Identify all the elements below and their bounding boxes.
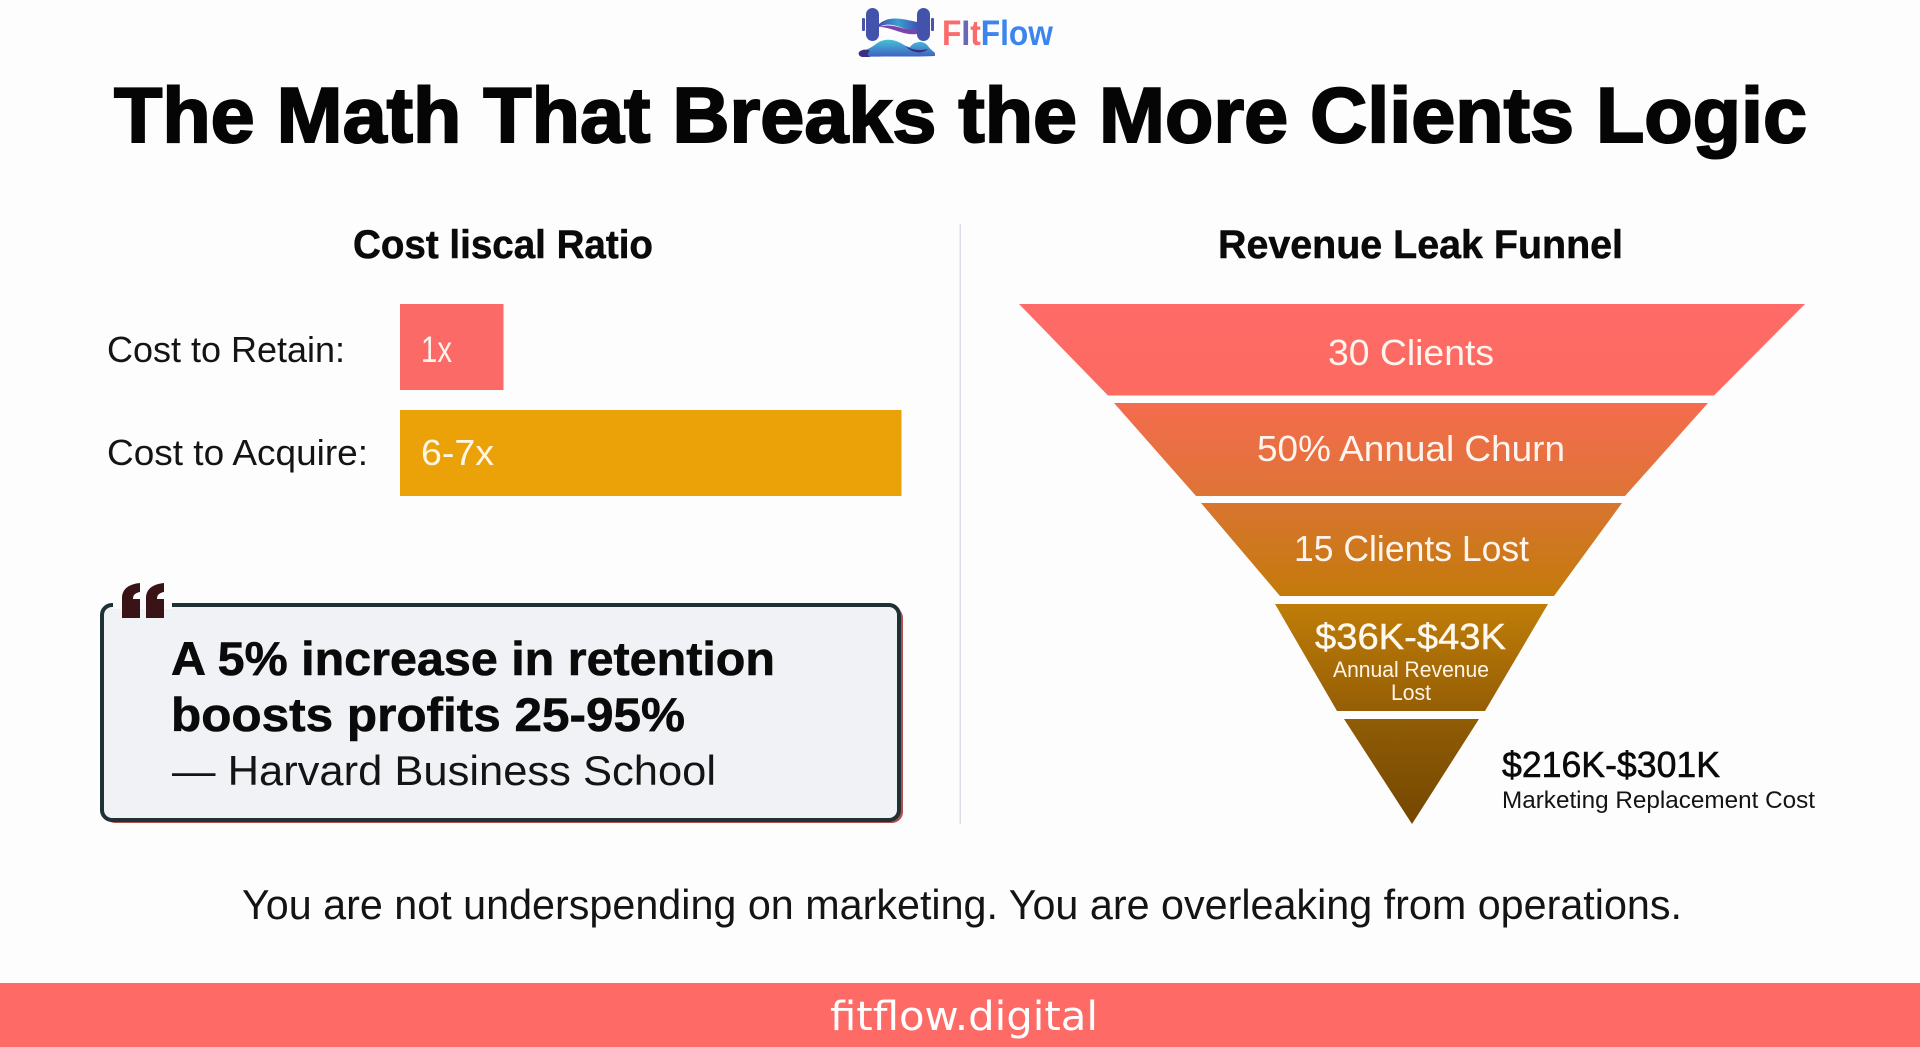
quote source: — Harvard Business School (172, 747, 716, 794)
callout: marketing replacement cost: Marketing Replacement Cost (1502, 787, 1815, 814)
callout: retention quote: boosts profits 25-95% (171, 688, 685, 741)
label: cost to retain: Cost to Retain: (107, 329, 345, 370)
heading: cost ratio: Cost liscal Ratio (353, 223, 653, 267)
label: cost to acquire: Cost to Acquire: (107, 432, 368, 473)
funnel segment: annual revenue lost: $36K-$43K (1315, 616, 1506, 657)
funnel segment: annual revenue lost: Lost (1391, 680, 1431, 705)
funnel segment: annual revenue lost (1275, 604, 1548, 711)
funnel segment: annual churn (1114, 403, 1708, 496)
funnel segment: annual revenue lost: Annual Revenue (1333, 657, 1489, 682)
funnel segment: annual churn: 50% Annual Churn (1257, 428, 1565, 469)
bar: acquire 6-7x (400, 410, 902, 496)
icon: dumbbell and wave (859, 8, 935, 57)
icon: quotation mark (122, 583, 164, 618)
logo wordmark: FItFlow (942, 14, 1054, 53)
bar: retain 1x (400, 304, 504, 390)
takeaway sentence: You are not underspending on marketing. You are overleaking from operations. (242, 881, 1682, 928)
bar: acquire 6-7x: 6-7x (421, 432, 494, 473)
callout: retention quote (102, 583, 903, 823)
title: The Math That Breaks the More Clients Logic (114, 71, 1807, 159)
logo: FitFlow (859, 8, 1054, 57)
panel: revenue leak funnel (1019, 223, 1815, 824)
funnel segment: tip (1344, 719, 1479, 824)
funnel segment: clients lost: 15 Clients Lost (1294, 528, 1529, 569)
callout: marketing replacement cost: $216K-$301K (1502, 744, 1720, 785)
callout: marketing replacement cost (1502, 744, 1815, 814)
funnel segment: 30 clients (1019, 304, 1805, 396)
footer bar (0, 983, 1920, 1047)
panel: cost ratio (107, 223, 902, 496)
footer bar: fitflow.digital (830, 994, 1098, 1040)
bar: retain 1x: 1x (421, 329, 452, 370)
quote text: A 5% increase in retention (171, 632, 775, 685)
heading: revenue leak funnel: Revenue Leak Funnel (1218, 223, 1623, 267)
funnel segment: 30 clients: 30 Clients (1328, 332, 1494, 373)
divider (960, 224, 961, 824)
funnel segment: clients lost (1201, 503, 1622, 596)
